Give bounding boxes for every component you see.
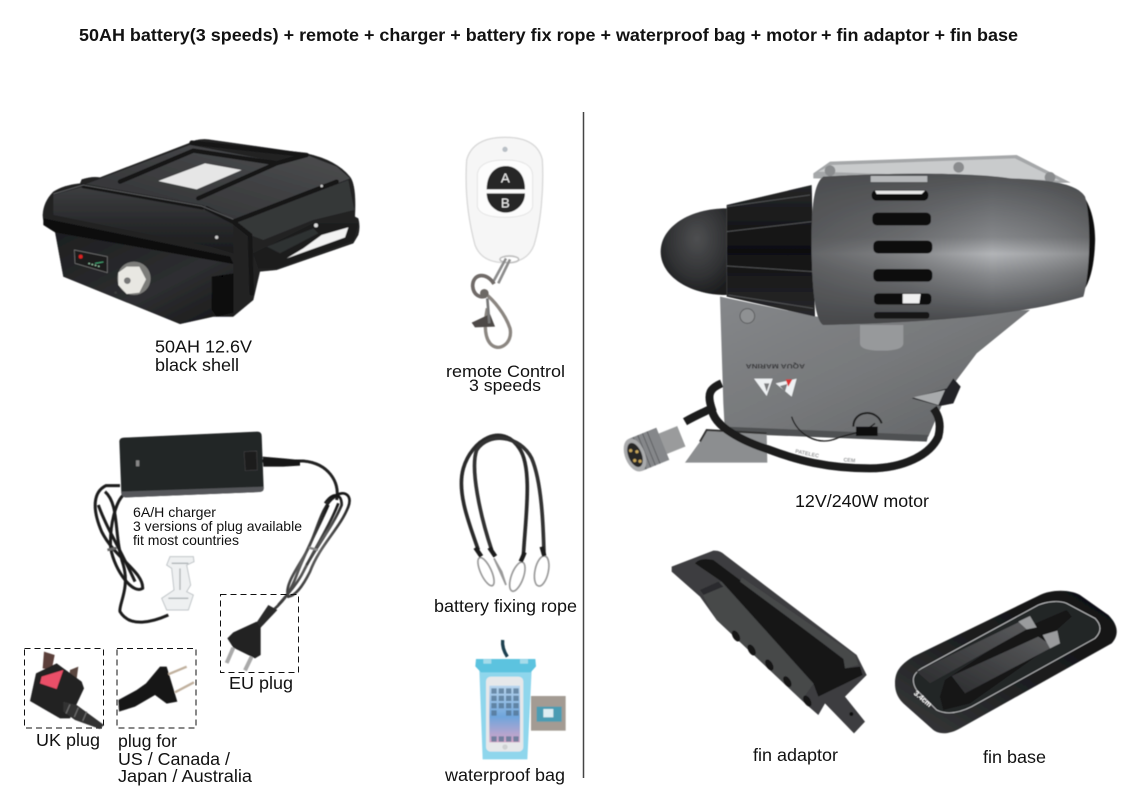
callout: US plug: Japan / Australia	[118, 766, 252, 786]
label: motor: 12V/240W motor	[795, 491, 929, 511]
label: waterproof bag: waterproof bag	[444, 765, 565, 785]
label: charger description: fit most countries	[133, 532, 239, 548]
icon: fin base plate	[895, 591, 1117, 733]
callout: US plug: plug for	[118, 731, 177, 751]
title: 50AH battery(3 speeds) + remote + charger + battery fix rope + waterproof bag + motor	[79, 25, 817, 45]
title: + fin adaptor + fin base	[821, 25, 1018, 45]
label: battery: black shell	[155, 355, 239, 375]
label: fin adaptor: fin adaptor	[753, 745, 838, 765]
label: battery: 50AH 12.6V	[155, 336, 252, 356]
divider	[582, 112, 584, 778]
icon: black battery case	[43, 139, 359, 324]
label: charger description	[133, 504, 302, 548]
callout: EU plug: EU plug	[229, 673, 293, 693]
callout: US plug: US / Canada /	[118, 749, 230, 769]
icon: fin base plate: 3.4cm	[912, 689, 934, 709]
label: battery	[155, 336, 252, 375]
callout: EU plug	[220, 594, 298, 693]
icon: blue phone pouch	[475, 640, 566, 759]
icon: grey underwater motor: CEM	[843, 457, 856, 464]
icon: grey underwater motor: PATELEC	[795, 449, 820, 460]
label: rope: battery fixing rope	[434, 596, 577, 616]
icon: white remote with key clasp	[466, 137, 543, 347]
icon: white remote with key clasp: A	[501, 170, 510, 185]
icon: grey underwater motor: AQUA MARINA	[745, 362, 805, 369]
callout: UK plug	[24, 648, 104, 750]
icon: white remote with key clasp: B	[501, 195, 510, 210]
label: remote control: remote Control	[446, 362, 565, 381]
panel: waterproof bag	[444, 640, 566, 785]
icon: grey underwater motor	[619, 155, 1095, 475]
icon: charger with cables	[95, 432, 350, 670]
label: charger description: 6A/H charger	[133, 504, 216, 520]
panel: battery fixing rope	[434, 435, 577, 616]
panel: motor	[619, 155, 1095, 511]
callout: UK plug: UK plug	[36, 730, 100, 750]
label: remote control: 3 speeds	[469, 376, 541, 395]
label: remote control	[446, 362, 565, 395]
panel: charger	[24, 432, 350, 786]
panel: battery	[43, 139, 359, 375]
callout: US plug	[117, 648, 252, 786]
icon: fin adaptor	[672, 551, 867, 733]
panel: remote control	[446, 137, 565, 395]
label: fin base: fin base	[983, 747, 1046, 767]
icon: two bungee ropes with carabiners	[461, 435, 551, 593]
panel: fin adaptor	[672, 551, 867, 765]
panel: fin base	[895, 591, 1117, 767]
label: charger description: 3 versions of plug available	[133, 518, 302, 534]
